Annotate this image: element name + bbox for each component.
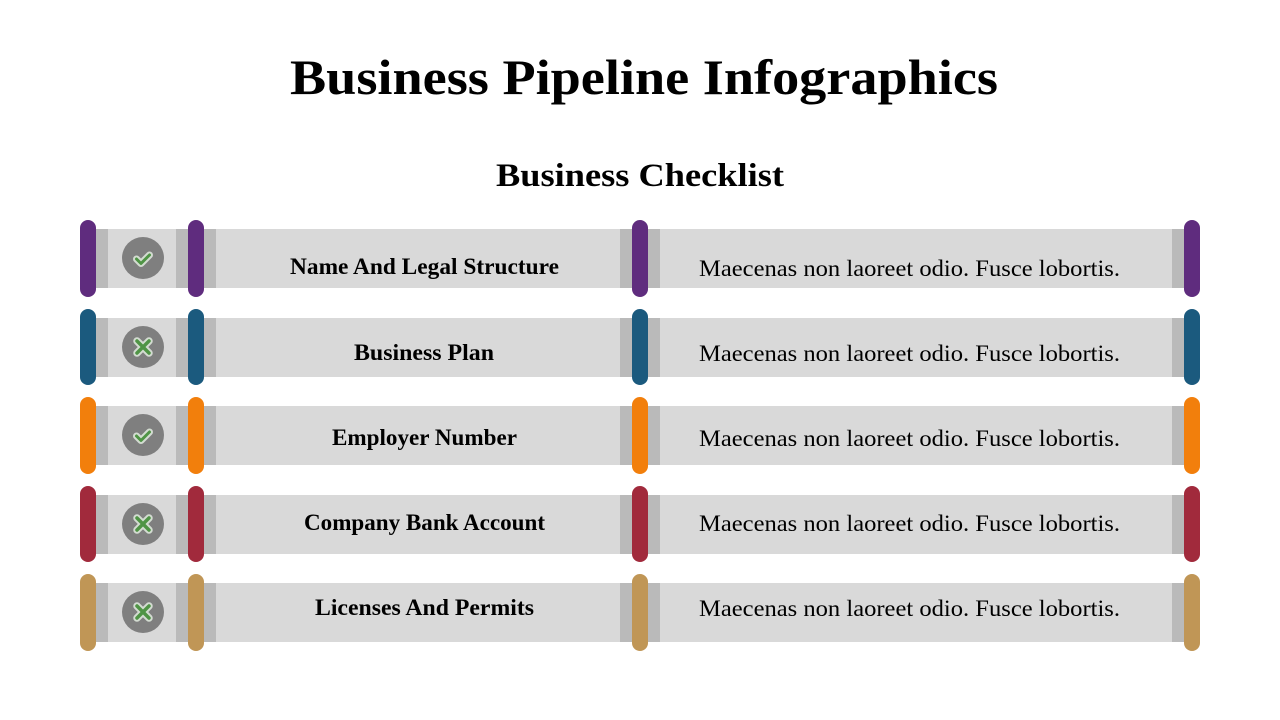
row 2 label: Business Plan (354, 340, 494, 365)
row 3: employer number (80, 397, 1200, 474)
icon: check mark (136, 255, 150, 264)
row 1 description: Maecenas non laoreet odio. Fusce lobortis. (699, 256, 1120, 281)
row 1: name and legal structure (80, 220, 1200, 297)
row 3 label: Employer Number (332, 425, 517, 450)
icon: cross mark (137, 518, 149, 530)
subtitle: Business Checklist (496, 158, 784, 194)
row 4 description: Maecenas non laoreet odio. Fusce lobortis. (699, 511, 1120, 536)
row 2 description: Maecenas non laoreet odio. Fusce lobortis. (699, 341, 1120, 366)
row 2: business plan (80, 309, 1200, 385)
icon: cross mark (137, 606, 149, 618)
row 3 description: Maecenas non laoreet odio. Fusce lobortis. (699, 426, 1120, 451)
row 1 label: Name And Legal Structure (290, 254, 559, 279)
row 4: company bank account (80, 486, 1200, 562)
row 5: licenses and permits (80, 574, 1200, 651)
row 5 label: Licenses And Permits (315, 595, 534, 620)
icon: check mark (136, 432, 150, 440)
icon: cross mark (137, 341, 149, 353)
title: Business Pipeline Infographics (290, 49, 998, 105)
row 5 description: Maecenas non laoreet odio. Fusce lobortis. (699, 596, 1120, 621)
row 4 label: Company Bank Account (304, 510, 545, 535)
